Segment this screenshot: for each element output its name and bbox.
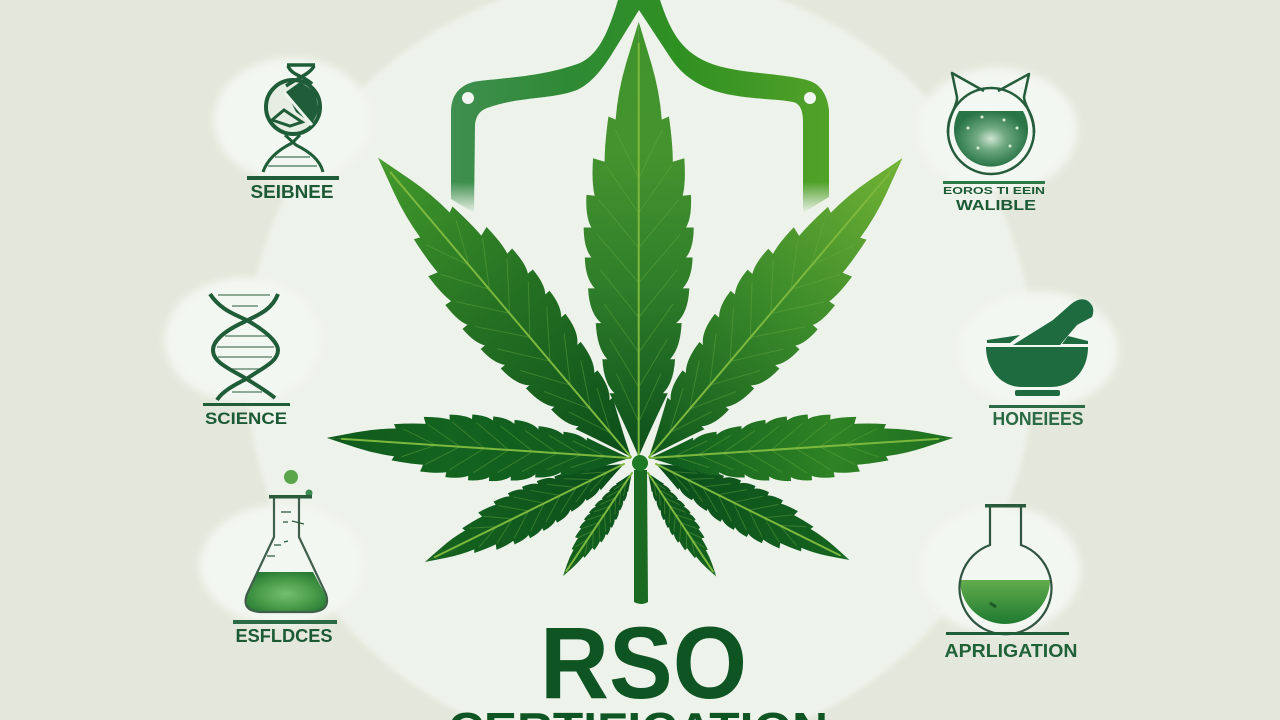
leaflet: lower left [414, 442, 635, 584]
label: HONEIEES [992, 409, 1084, 429]
leaflet: upper right [614, 128, 938, 487]
icon: mortar and pestle [986, 299, 1093, 396]
icon: round vessel [948, 73, 1034, 174]
infographic canvas [164, 0, 1119, 720]
icon backdrop blobs [165, 58, 1118, 634]
item: middle left DNA [203, 294, 290, 428]
icon: globe DNA [263, 65, 323, 172]
icon: conical flask [246, 470, 327, 612]
item: top right vessel [943, 73, 1045, 214]
label: SEIBNEE [250, 182, 334, 202]
rule [233, 620, 337, 624]
icon: round flask [960, 504, 1052, 634]
rule [247, 176, 339, 180]
rule [989, 405, 1085, 408]
item: top left science globe [247, 65, 339, 202]
label line 1: EOROS TI EEIN [943, 186, 1045, 197]
leaflet: lower right [645, 442, 861, 582]
leaflet: upper left [343, 128, 666, 487]
icon: DNA helix [210, 294, 278, 400]
item: middle right mortar [986, 299, 1093, 429]
background circle [246, 0, 1034, 720]
title: RSO: RSO [540, 606, 747, 720]
item: bottom right flask [944, 504, 1078, 661]
leaflet: lower left small [551, 465, 644, 584]
leaflet: middle right [648, 405, 956, 491]
leaflet: lower right small [636, 465, 728, 584]
leaf centre node [632, 455, 648, 471]
label line 2: WALIBLE [956, 197, 1036, 214]
leaflet: top centre [584, 22, 694, 457]
leaflet: middle left [324, 405, 632, 491]
label: SCIENCE [205, 409, 287, 428]
label: APRLIGATION [944, 641, 1078, 661]
rule [203, 403, 290, 406]
rule [943, 181, 1045, 184]
cannabis leaf [324, 22, 956, 604]
rule [946, 632, 1069, 635]
stem [634, 470, 648, 604]
label: ESFLDCES [236, 626, 332, 646]
shield frame arch [451, 0, 829, 213]
item: bottom left flask [233, 470, 337, 646]
